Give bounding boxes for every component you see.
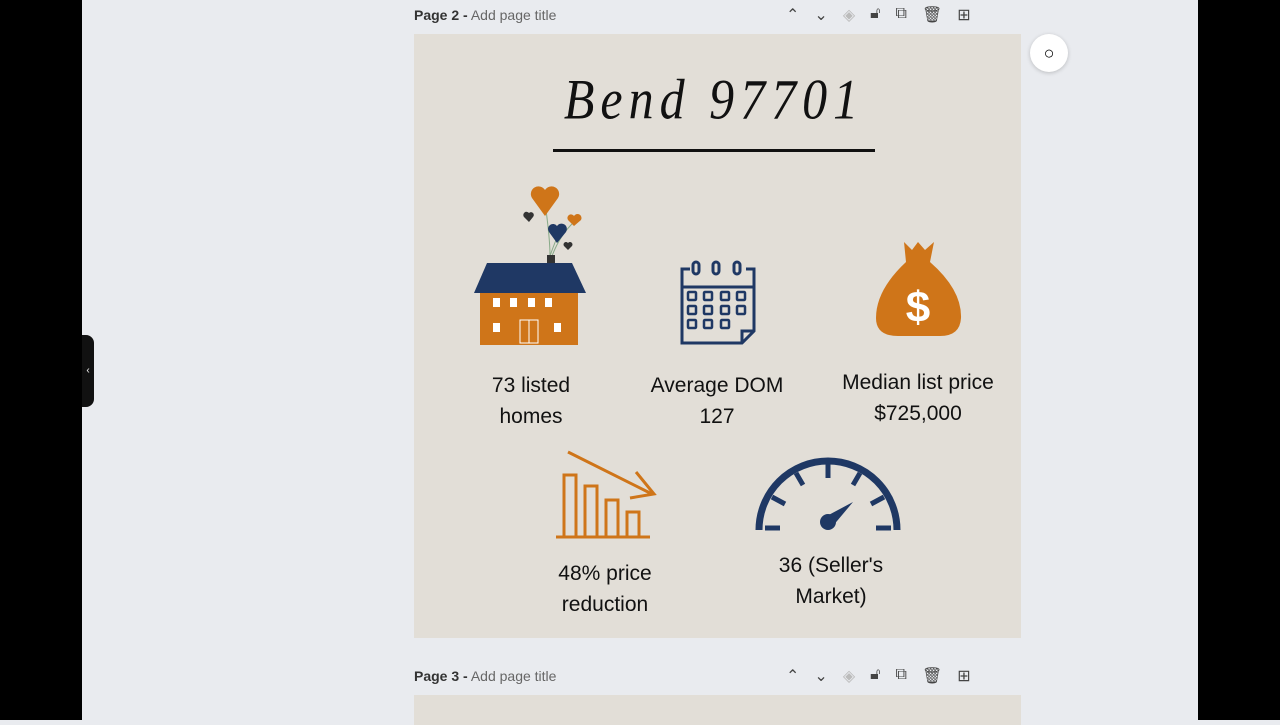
text: listed homes: homes [499,405,563,428]
toolbar icons: ⌃ [786,7,799,24]
text: median price [842,371,994,425]
comment button [1030,34,1068,72]
page 3 toolbar: ⧉ [896,666,907,683]
text: price reduction: reduction [562,593,648,616]
page 3 header: Page 3 - Add page title [414,668,556,684]
page 3 toolbar: 🔓︎ [870,666,880,683]
page canvas [414,34,1021,638]
page 2 header: Page 2 - Add page title [414,7,556,23]
icon: money bag: $ [906,283,930,332]
text: price reduction [558,562,652,616]
page 3 toolbar [786,666,971,685]
text: seller's market: Market) [795,585,867,608]
toolbar icons: ◈ [843,7,855,24]
text: average DOM: 127 [699,405,735,428]
text: average DOM: Average DOM [651,374,783,397]
side collapse tab: ‹ [86,365,90,376]
toolbar icons: ⌄ [814,7,828,24]
title underline [553,149,875,152]
title: Bend 97701 [564,67,864,131]
side collapse tab [82,335,94,407]
icon: bar chart declining [556,450,657,538]
page 3 toolbar: ⊞ [957,668,971,685]
icon: house [474,186,586,345]
toolbar icons: 🗑︎ [922,7,942,24]
text: listed homes [492,374,570,428]
toolbar icons: ⊞ [957,7,971,24]
text: seller's market [779,554,883,608]
right black bar [1198,0,1280,720]
comment button: ○ [1044,43,1054,63]
text: average DOM [650,374,783,428]
icon: gauge [756,458,900,530]
toolbar icons: ⧉ [896,5,907,22]
text: price reduction: 48% price [558,562,652,585]
text: median price: $725,000 [874,402,962,425]
icon: calendar [680,260,756,344]
page 3 toolbar: ⌄ [814,668,828,685]
text: seller's market: 36 (Seller's [779,554,883,577]
icon: money bag [876,242,962,336]
text: median price: Median list price [842,371,994,394]
page 3 toolbar: ⌃ [786,668,799,685]
toolbar icons: 🔓︎ [870,5,880,22]
page 3 canvas [414,695,1021,725]
toolbar icons [786,5,971,24]
text: listed homes: 73 listed [492,374,570,397]
page 3 toolbar: ◈ [843,668,855,685]
page 3 toolbar: 🗑︎ [922,668,942,685]
left black bar [0,0,82,720]
